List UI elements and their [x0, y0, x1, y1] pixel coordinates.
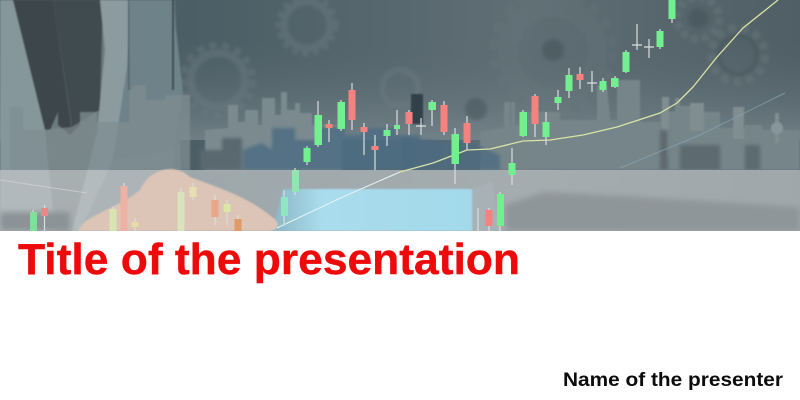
tablet screen: [272, 188, 474, 231]
skyline silhouette: [10, 80, 800, 170]
hand: [78, 169, 278, 231]
suit and shirt: [0, 0, 183, 231]
gears: [183, 0, 765, 120]
dark tower: [411, 94, 423, 124]
translucent band: [0, 170, 800, 231]
title: Title of the presentation: [18, 235, 520, 284]
backdrop: [0, 0, 800, 231]
presenter name: Name of the presenter: [563, 369, 783, 391]
green candles: [30, 0, 676, 231]
faded candles over hand: [110, 186, 242, 231]
lower city panorama: [0, 192, 800, 231]
trend lines: [0, 0, 785, 228]
candlestick chart: [30, 0, 676, 231]
red candles: [41, 74, 584, 226]
header photo banner: [0, 0, 800, 231]
blue city buildings: [200, 127, 760, 170]
